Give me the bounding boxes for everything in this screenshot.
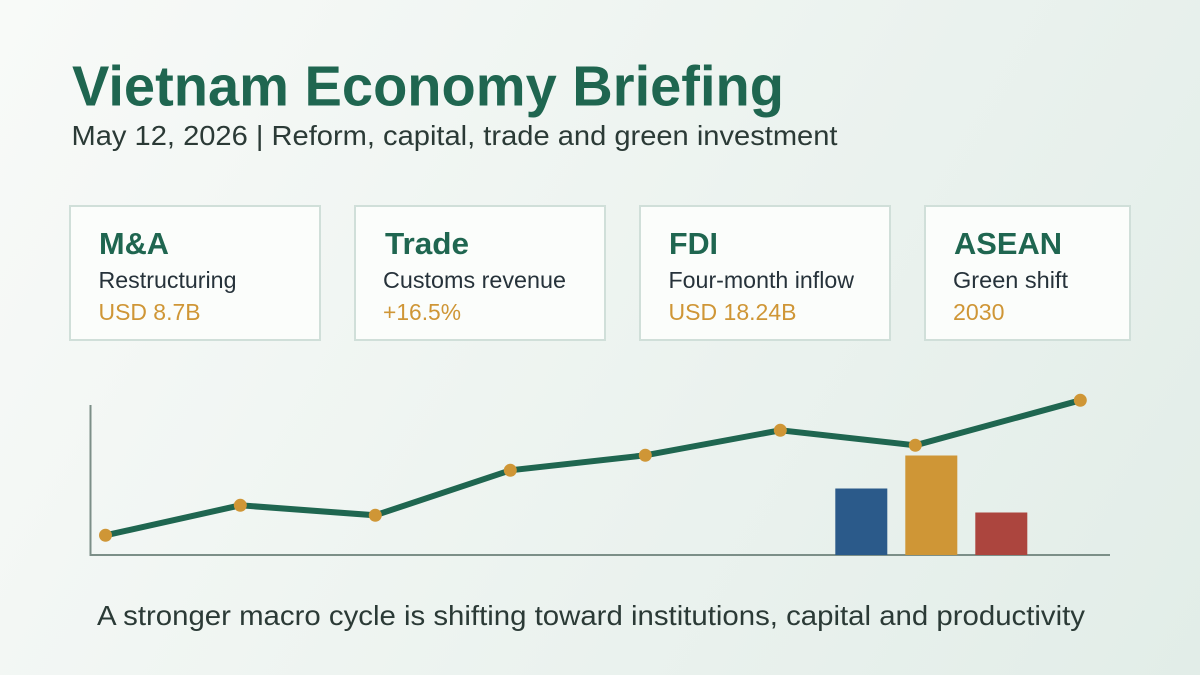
panel: Trade [355,206,605,340]
line chart [99,394,1087,542]
panel: FDI [640,206,890,340]
ASEAN heading: ASEAN [954,226,1062,261]
panel: M&A [70,206,320,340]
bar: red [975,512,1027,555]
M&A label: Restructuring [98,267,236,293]
panel: ASEAN [925,206,1130,340]
caption: A stronger macro cycle is shifting toward institutions, capital and productivity [97,600,1085,631]
M&A heading: M&A [99,226,169,261]
FDI value: USD 18.24B [668,299,796,325]
FDI label: Four-month inflow [668,267,854,293]
M&A value: USD 8.7B [98,299,200,325]
Trade label: Customs revenue [383,267,566,293]
subtitle: May 12, 2026 | Reform, capital, trade and green investment [72,120,838,151]
chart axes [90,405,1110,555]
ASEAN value: 2030 [953,299,1004,325]
FDI heading: FDI [669,226,718,261]
Trade heading: Trade [385,226,469,261]
title: Vietnam Economy Briefing [72,54,784,118]
bar: gold [905,456,957,555]
Trade value: +16.5% [383,299,461,325]
ASEAN label: Green shift [953,267,1069,293]
bar: blue [835,488,887,555]
